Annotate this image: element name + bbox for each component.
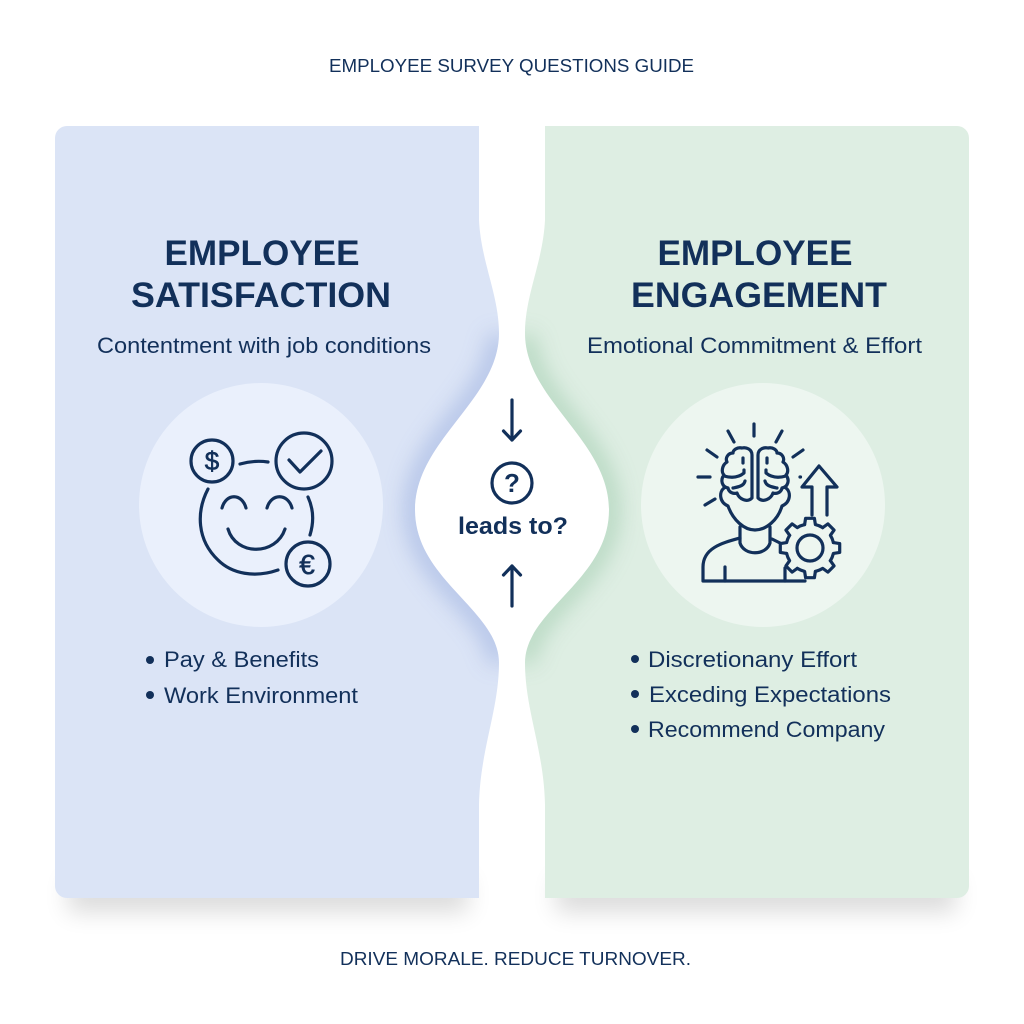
heading: employee satisfaction: EMPLOYEE	[164, 234, 360, 273]
heading: employee engagement: ENGAGEMENT	[631, 276, 887, 315]
icon: idea rays	[698, 424, 803, 505]
icon: check badge	[276, 433, 332, 489]
center connector: leads to	[458, 400, 568, 606]
panel: employee engagement	[525, 126, 969, 912]
bullet list: satisfaction: Work Environment	[164, 683, 359, 708]
footer tagline: DRIVE MORALE. REDUCE TURNOVER.	[340, 949, 691, 969]
subtitle: engagement: Emotional Commitment & Effort	[587, 333, 923, 358]
icon: question circle	[492, 463, 532, 503]
heading: employee satisfaction	[131, 234, 391, 315]
icon: dollar coin	[191, 440, 233, 482]
arrow: down	[504, 400, 520, 440]
bullet list: engagement: Recommend Company	[648, 717, 886, 742]
label: leads to: leads to?	[458, 513, 568, 540]
heading: employee satisfaction: SATISFACTION	[131, 276, 391, 315]
panel shape: blue	[55, 126, 499, 898]
bullet list: satisfaction: Pay & Benefits	[164, 647, 319, 672]
panel: employee satisfaction	[55, 126, 499, 912]
icon circle: smiley with money	[139, 383, 383, 627]
icon: gear	[780, 518, 840, 578]
subtitle: satisfaction: Contentment with job conditions	[97, 333, 431, 358]
bullet list: engagement: Exceding Expectations	[649, 682, 891, 707]
heading: employee engagement: EMPLOYEE	[658, 234, 852, 273]
bullet list: engagement	[631, 647, 891, 742]
icon circle: person with brain	[641, 383, 885, 627]
icon: dollar coin: $	[205, 446, 220, 476]
icon: person	[703, 488, 805, 581]
icon: euro coin: €	[299, 549, 315, 580]
title: EMPLOYEE SURVEY QUESTIONS GUIDE	[329, 56, 694, 76]
bullet list: satisfaction	[146, 647, 359, 708]
icon: euro coin	[286, 542, 330, 586]
arrow: up	[504, 566, 520, 606]
icon: smiling face	[200, 461, 313, 574]
panel shape: green	[525, 126, 969, 898]
bullet list: engagement: Discretionany Effort	[648, 647, 858, 672]
heading: employee engagement	[631, 234, 887, 315]
icon: question circle: ?	[504, 468, 520, 498]
icon: up arrow	[802, 466, 837, 515]
icon: brain	[722, 448, 788, 500]
